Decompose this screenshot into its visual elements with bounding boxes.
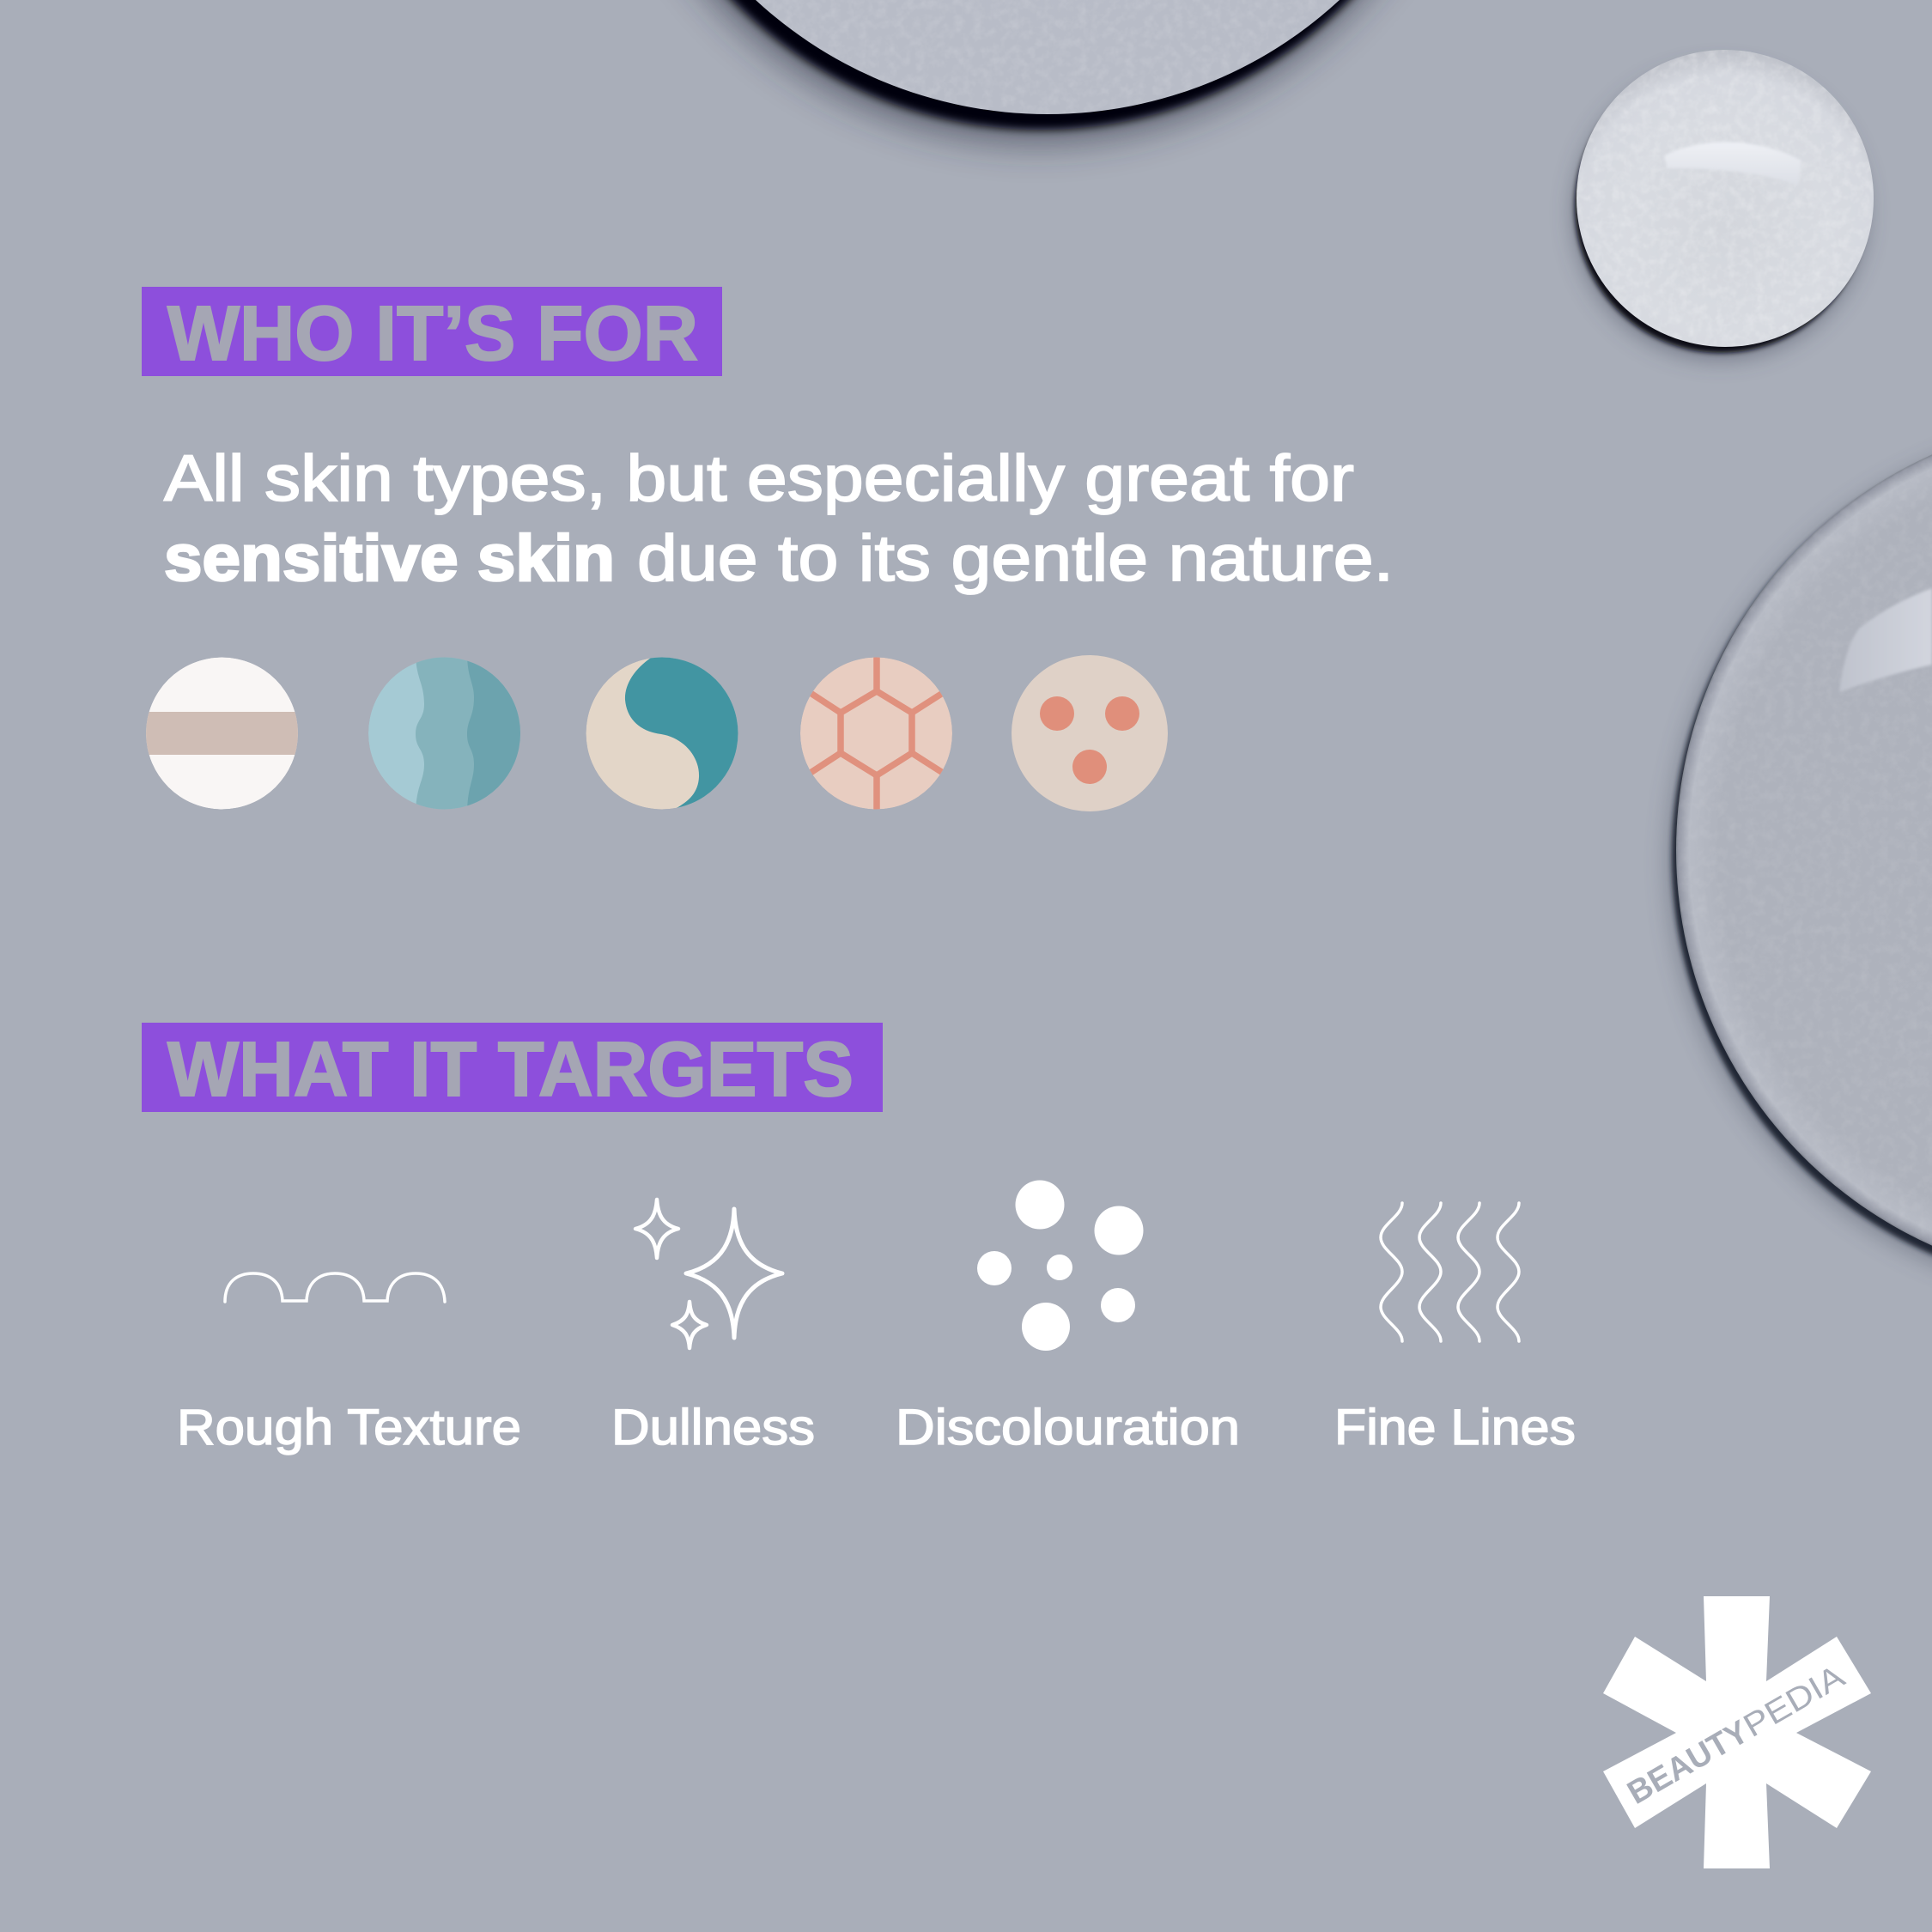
icon: dullness sparkles xyxy=(635,1200,782,1348)
label: discolouration: Discolouration xyxy=(896,1400,1240,1455)
icon: oily skin xyxy=(799,653,955,816)
icon: discolouration dots xyxy=(977,1180,1144,1351)
icon: fine lines xyxy=(1381,1203,1519,1341)
icon: normal skin xyxy=(142,658,305,809)
logo wordmark xyxy=(1621,1658,1851,1812)
drop highlight xyxy=(1839,588,1932,692)
icon: acne-prone skin xyxy=(1012,655,1168,811)
text block: intro paragraph xyxy=(164,442,1394,595)
heading: who it's for: WHO IT’S FOR xyxy=(167,291,698,377)
water drop: large right xyxy=(1669,416,1932,1296)
icon: dry skin xyxy=(368,653,524,816)
text block: intro paragraph: sensitive skin xyxy=(164,522,615,595)
label: rough texture: Rough Texture xyxy=(177,1400,521,1455)
heading: what it targets: WHAT IT TARGETS xyxy=(167,1027,854,1113)
text block: intro paragraph: due to its gentle nature. xyxy=(637,522,1394,595)
text block: intro paragraph: All skin types, but especially great for xyxy=(164,442,1354,515)
label: fine lines: Fine Lines xyxy=(1334,1400,1576,1455)
logo wordmark: BEAUTY xyxy=(1621,1714,1755,1812)
logo: beautypedia asterisk xyxy=(1603,1596,1871,1868)
icon: combination skin xyxy=(586,658,738,809)
water drop: top xyxy=(601,0,1494,142)
water drop: small right xyxy=(1575,50,1874,357)
logo wordmark: PEDIA xyxy=(1738,1658,1851,1745)
label: dullness: Dullness xyxy=(611,1400,815,1455)
drop highlight xyxy=(1664,142,1801,185)
icon: rough texture xyxy=(225,1273,445,1302)
